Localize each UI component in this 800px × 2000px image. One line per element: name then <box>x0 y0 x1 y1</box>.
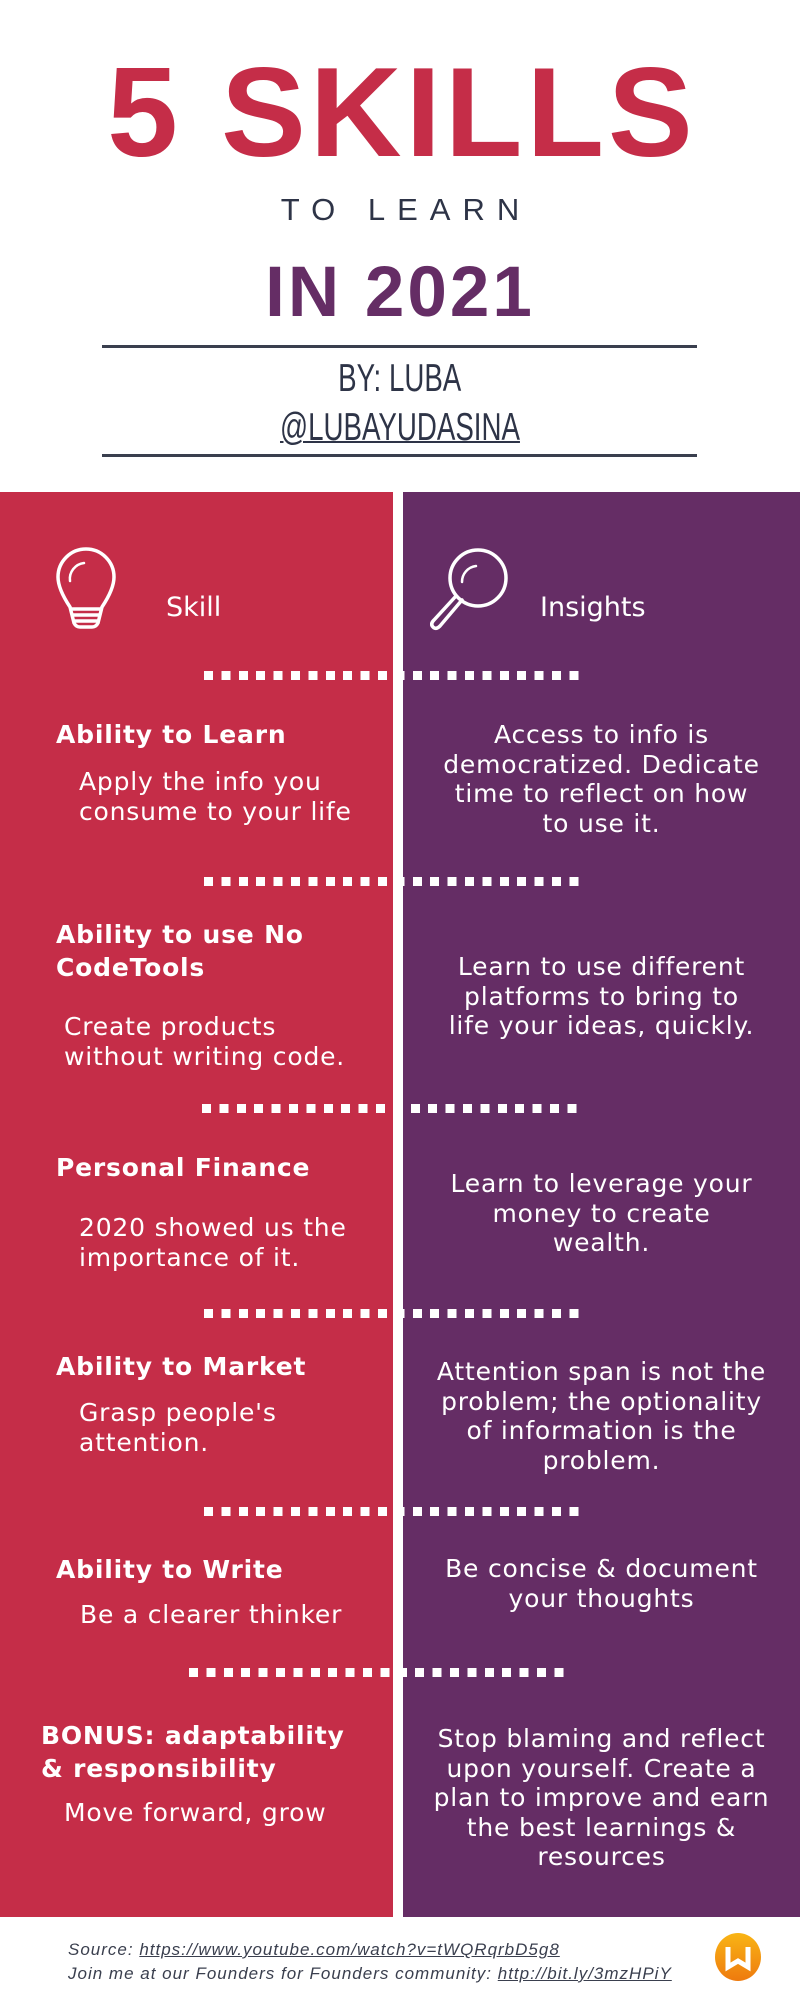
skill 4 heading: Ability to Market <box>56 1352 306 1381</box>
skill 1 heading: Ability to Learn <box>56 720 286 749</box>
panel: insights column <box>403 492 800 1917</box>
insight 3: Learn to leverage your <box>450 1169 752 1198</box>
insight 5 <box>445 1554 758 1612</box>
bonus description: Move forward, grow <box>64 1798 326 1827</box>
icon: lightbulb <box>56 547 116 629</box>
insight 2 <box>449 952 754 1040</box>
insight 3: wealth. <box>553 1228 650 1257</box>
bonus heading: BONUS: adaptability <box>41 1721 345 1750</box>
skill 4 description: Grasp people's <box>79 1398 277 1427</box>
insight 1 <box>443 720 760 838</box>
insight 4: Attention span is not the <box>437 1357 766 1386</box>
insight 3 <box>450 1169 752 1257</box>
insight 5: your thoughts <box>509 1584 694 1612</box>
panel: skill column <box>0 492 393 1917</box>
footer: sources <box>68 1940 672 1983</box>
skill 2 description: Create products <box>64 1012 276 1041</box>
skill 3 description <box>79 1213 347 1272</box>
insight 4 <box>437 1357 766 1474</box>
skill 3 heading: Personal Finance <box>56 1153 310 1182</box>
insight 4: of information is the <box>466 1416 737 1445</box>
heading: insights: Insights <box>540 592 646 623</box>
bonus insight: resources <box>537 1842 666 1871</box>
bonus heading <box>41 1721 345 1783</box>
insight 1: time to reflect on how <box>455 779 748 808</box>
icon: magnifier <box>430 548 508 630</box>
insight 4: problem; the optionality <box>441 1386 762 1416</box>
skill 2 description: without writing code. <box>64 1042 345 1070</box>
heading: skill: Skill <box>166 592 221 623</box>
skill 3 description: 2020 showed us the <box>79 1213 347 1242</box>
insight 1: to use it. <box>543 808 660 838</box>
skill 2 heading <box>56 920 304 982</box>
insight 5: Be concise & document <box>445 1554 758 1583</box>
insight 1: Access to info is <box>494 720 709 749</box>
insight 3: money to create <box>492 1198 711 1228</box>
title: 5 SKILLS <box>107 41 697 183</box>
byline block: @LUBAYUDASINA <box>280 406 519 449</box>
insight 2: Learn to use different <box>458 952 745 981</box>
icon: logo <box>715 1933 761 1981</box>
skill 2 heading: Ability to use No <box>56 920 304 949</box>
insight 4: problem. <box>543 1446 660 1474</box>
skill 5 description: Be a clearer thinker <box>80 1600 342 1629</box>
skill 1 description: consume to your life <box>79 796 352 826</box>
insight 2: life your ideas, quickly. <box>449 1011 754 1040</box>
skill 4 description <box>79 1398 277 1456</box>
skill 5 heading: Ability to Write <box>56 1555 283 1584</box>
skill 2 heading: CodeTools <box>56 953 205 982</box>
insight 1: democratized. Dedicate <box>443 750 760 778</box>
bonus heading: & responsibility <box>41 1754 277 1783</box>
skill 3 description: importance of it. <box>79 1242 300 1272</box>
byline block <box>102 345 697 457</box>
skill 1 description: Apply the info you <box>79 767 322 796</box>
bonus insight: Stop blaming and reflect <box>438 1724 765 1753</box>
footer: sources: Source: https://www.youtube.com/watch?v=tWQRqrbD5g8 <box>68 1940 560 1959</box>
subtitle: in 2021: IN 2021 <box>265 253 535 332</box>
footer: sources: Join me at our Founders for Founders community: http://bit.ly/3mzHPiY <box>68 1964 672 1983</box>
bonus insight: upon yourself. Create a <box>446 1754 756 1782</box>
byline block: BY: LUBA <box>338 357 461 400</box>
skill 4 description: attention. <box>79 1428 209 1456</box>
skill 2 description <box>64 1012 345 1070</box>
bonus insight <box>434 1724 769 1871</box>
bonus insight: the best learnings & <box>467 1812 736 1842</box>
skill 1 description <box>79 767 352 826</box>
subtitle: to learn: TO LEARN <box>281 192 531 227</box>
bonus insight: plan to improve and earn <box>434 1783 769 1812</box>
insight 2: platforms to bring to <box>464 982 739 1010</box>
